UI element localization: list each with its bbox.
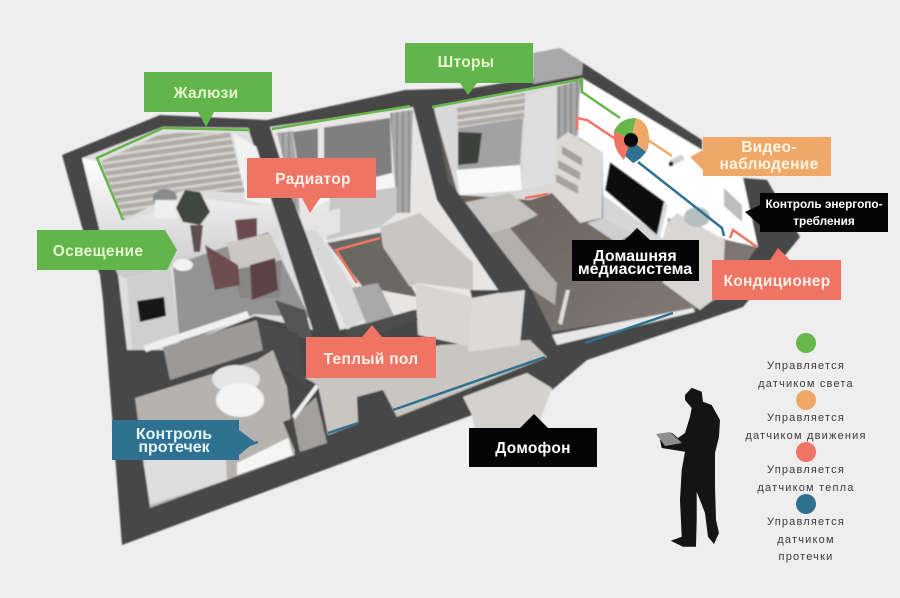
stub wall — [357, 390, 397, 432]
bathroom jamb — [283, 418, 300, 456]
central hub wheel — [614, 118, 649, 163]
sill — [456, 165, 522, 195]
outer wall structure — [62, 48, 800, 545]
label: home media system: медиасистема — [578, 261, 692, 278]
floor lamp — [153, 189, 193, 271]
below window wall — [327, 187, 397, 240]
label: radiator: Радиатор — [275, 171, 351, 188]
shelf gaps — [556, 146, 582, 194]
bedroom floor — [327, 232, 417, 297]
green segment — [614, 118, 636, 140]
label: leak control: Контроль — [136, 426, 212, 443]
media console — [663, 213, 725, 310]
orange segment — [631, 118, 649, 152]
partition wall kitchen bedroom — [248, 120, 350, 330]
legend: light sensor: Управляется — [767, 360, 845, 372]
label: leak control — [112, 420, 255, 460]
bathroom — [135, 300, 327, 508]
label: video surveillance: наблюдение — [719, 156, 819, 173]
floor plan — [62, 48, 800, 545]
legend: motion sensor — [745, 390, 867, 442]
label: intercom: Домофон — [495, 440, 571, 457]
kitchen room — [82, 127, 313, 352]
toilet room — [163, 320, 263, 380]
label: video surveillance: Видео- — [741, 139, 797, 156]
upper right white wall — [233, 133, 272, 205]
label: blinds: Жалюзи — [173, 85, 238, 102]
legend: light sensor: датчиком света — [758, 378, 854, 390]
sofa — [380, 213, 473, 290]
lower partition — [345, 310, 418, 342]
white wall — [575, 78, 758, 262]
bathroom door — [293, 397, 327, 453]
label: air conditioner: Кондиционер — [724, 273, 830, 290]
orange line — [648, 140, 672, 156]
corridor floor — [305, 340, 547, 435]
decor plant — [684, 207, 710, 227]
legend: leak sensor: протечки — [779, 551, 833, 563]
coffee table — [587, 218, 633, 243]
kitchen floor — [173, 232, 310, 345]
label: radiator — [247, 158, 376, 213]
plant — [176, 190, 210, 252]
red segment — [614, 131, 631, 160]
television — [605, 162, 668, 238]
legend: leak sensor: датчиком — [777, 534, 835, 546]
label: home media system: Домашняя — [593, 248, 677, 265]
label: warm floor — [306, 325, 436, 378]
floor — [432, 78, 757, 332]
label: curtains: Шторы — [438, 54, 494, 71]
curtain — [557, 80, 580, 165]
window frame — [318, 127, 324, 190]
energy meter — [724, 188, 742, 222]
door dark — [258, 322, 307, 387]
sofa seat — [485, 228, 557, 305]
bathtub — [143, 435, 227, 505]
balcony view — [458, 118, 523, 170]
label: warm floor: Теплый пол — [324, 351, 418, 368]
curtain right — [390, 110, 413, 213]
balcony — [533, 48, 583, 84]
window sill — [305, 173, 397, 210]
label: energy control — [745, 193, 888, 232]
balcony plant — [458, 132, 482, 165]
blue segment — [624, 140, 646, 163]
label: video surveillance — [690, 137, 831, 176]
label: home media system — [572, 228, 699, 281]
legend — [745, 333, 867, 563]
camera — [668, 154, 685, 166]
balcony door — [522, 87, 557, 190]
kitchen counter — [127, 265, 180, 350]
dining table — [205, 218, 283, 300]
label: lighting: Освещение — [53, 243, 143, 260]
blue lines — [243, 162, 724, 447]
red lines — [336, 118, 757, 283]
bedroom — [270, 107, 503, 347]
legend: motion sensor: датчиком движения — [745, 430, 867, 442]
legend: light sensor — [758, 333, 854, 390]
balcony wall — [433, 80, 580, 200]
label: energy control: Контроль энергопо- — [765, 197, 883, 211]
tablet — [656, 432, 682, 446]
legend: heat sensor: датчиком тепла — [757, 482, 855, 494]
window pane — [293, 118, 392, 195]
legend: leak sensor: Управляется — [767, 516, 845, 528]
counter edge — [143, 311, 250, 352]
upper door — [275, 300, 313, 340]
kitchen walls — [82, 127, 313, 350]
bathroom room — [135, 350, 295, 508]
sensor lines — [97, 79, 757, 447]
curtain left — [277, 131, 300, 215]
legend: heat sensor: Управляется — [767, 464, 845, 476]
blinds right — [163, 133, 245, 193]
bedroom walls — [270, 107, 503, 330]
green lines — [97, 79, 620, 220]
white block by partition — [468, 290, 525, 352]
label: lighting — [37, 230, 177, 270]
label: air conditioner — [712, 248, 841, 300]
baseboard — [552, 308, 695, 345]
lower wall shade — [603, 195, 665, 262]
legend: heat sensor — [757, 442, 855, 494]
sink — [212, 365, 264, 417]
warm floor mat — [352, 283, 397, 328]
label: intercom — [469, 414, 597, 467]
window panes — [457, 93, 525, 128]
label: energy control: требления — [793, 214, 855, 228]
legend: leak sensor — [767, 494, 845, 563]
body — [660, 388, 720, 547]
door panel — [415, 283, 472, 347]
blinds left — [100, 133, 183, 220]
legend: motion sensor: Управляется — [767, 412, 845, 424]
corner sofa — [448, 180, 557, 287]
person silhouette — [656, 388, 720, 547]
entry niche — [463, 373, 552, 430]
closet block — [305, 230, 367, 330]
radiator — [310, 208, 340, 240]
bath side — [237, 438, 293, 475]
door edge — [558, 290, 570, 325]
shelf unit — [552, 132, 603, 223]
label: curtains — [405, 43, 533, 95]
kitchen white wall — [82, 158, 280, 278]
label: leak control: протечек — [138, 439, 211, 456]
door leaf — [292, 384, 319, 419]
living room — [432, 78, 758, 345]
partition wall bedroom living — [417, 93, 530, 298]
black centre — [624, 133, 638, 147]
label: blinds — [144, 72, 272, 127]
